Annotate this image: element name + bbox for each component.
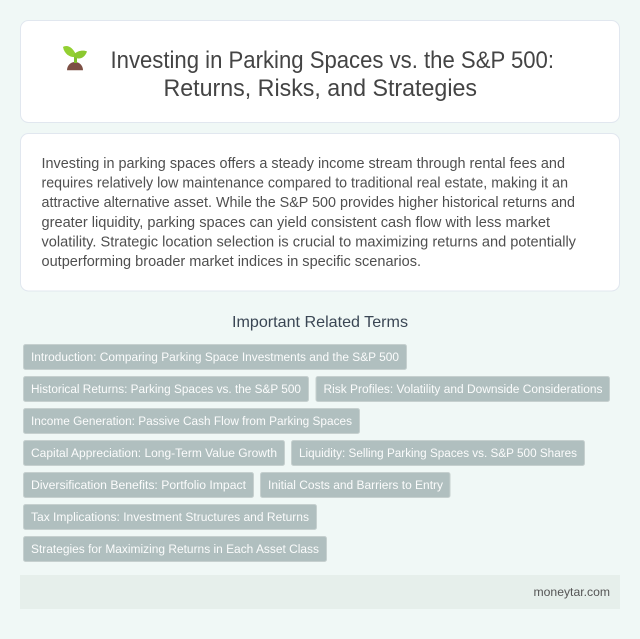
- tag: diversification benefits: [24, 472, 254, 498]
- tag: diversification benefits: Diversification Benefits: Portfolio Impact: [31, 478, 247, 492]
- title: Investing in Parking Spaces vs. the S&P 500:: [110, 47, 554, 74]
- icon: sprout: [63, 46, 87, 70]
- title: [110, 47, 554, 102]
- tag: risk profiles: [316, 376, 610, 402]
- tag: introduction: Introduction: Comparing Parking Space Investments and the S&P 500: [31, 350, 399, 364]
- tag: tax implications: [24, 504, 316, 530]
- tag: historical returns: [24, 376, 308, 402]
- intro paragraph: requires relatively low maintenance compared to traditional real estate, making it an: [42, 176, 568, 192]
- tag: initial costs: [260, 472, 450, 498]
- tag: capital appreciation: Capital Appreciation: Long-Term Value Growth: [31, 446, 277, 460]
- intro paragraph: Investing in parking spaces offers a steady income stream through rental fees and: [42, 156, 565, 172]
- footer bar: [20, 575, 620, 609]
- footer source text: moneytar.com: [534, 585, 610, 599]
- term tags: [24, 344, 610, 562]
- panel: intro text card: [20, 134, 620, 291]
- heading: important related terms: Important Related Terms: [232, 314, 408, 331]
- tag: income generation: Income Generation: Passive Cash Flow from Parking Spaces: [31, 414, 352, 428]
- title: Returns, Risks, and Strategies: [164, 75, 477, 102]
- tag: liquidity: Liquidity: Selling Parking Spaces vs. S&P 500 Shares: [299, 446, 577, 460]
- intro paragraph: [42, 156, 577, 270]
- tag: strategies: Strategies for Maximizing Returns in Each Asset Class: [31, 542, 319, 556]
- panel: title card: [20, 20, 620, 122]
- tag: risk profiles: Risk Profiles: Volatility and Downside Considerations: [324, 382, 602, 396]
- tag: introduction: [24, 344, 406, 370]
- tag: income generation: [24, 408, 360, 434]
- tag: strategies: [24, 536, 326, 562]
- intro paragraph: attractive alternative asset. While the S&P 500 provides higher historical returns and: [42, 195, 575, 211]
- tag: tax implications: Tax Implications: Investment Structures and Returns: [31, 510, 309, 524]
- tag: initial costs: Initial Costs and Barriers to Entry: [268, 478, 444, 492]
- intro paragraph: greater liquidity, parking spaces can yield consistent cash flow with less market: [42, 215, 550, 231]
- intro paragraph: volatility. Strategic location selection is crucial to maximizing returns and potentially: [42, 234, 577, 250]
- intro paragraph: outperforming broader market indices in specific scenarios.: [42, 254, 421, 270]
- tag: capital appreciation: [24, 440, 284, 466]
- tag: liquidity: [292, 440, 584, 466]
- tag: historical returns: Historical Returns: Parking Spaces vs. the S&P 500: [31, 382, 301, 396]
